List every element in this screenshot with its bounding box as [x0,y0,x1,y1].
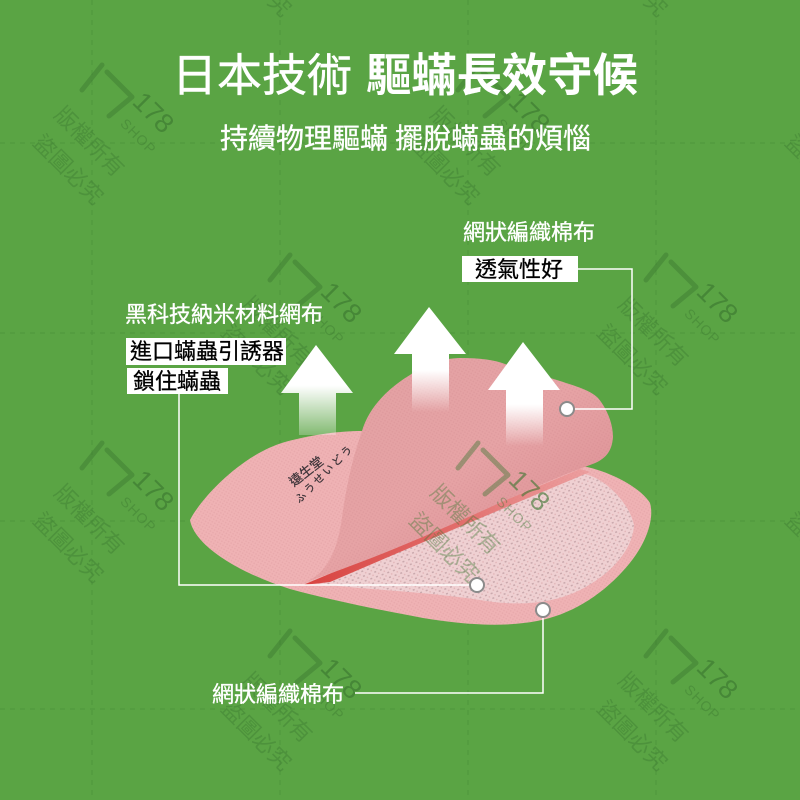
watermark 2: 盜圖必究 [404,130,484,210]
watermark 4: 版權所有 [613,292,693,372]
label: nano fabric: 黑科技納米材料網布 [125,302,323,327]
lower pad [190,431,651,625]
marker dot [536,603,550,617]
marker dot [560,402,574,416]
watermark 6 [404,443,556,588]
leader line [179,394,470,585]
fold shadow [303,469,590,585]
watermark 5: SHOP [117,493,160,536]
subtitle: 擺脫蟎蟲的煩惱 [395,123,591,154]
watermark 2: 版權所有 [425,102,505,182]
watermark 8: 版權所有 [613,668,693,748]
watermark 3: SHOP [305,305,348,348]
tag: breathable: 透氣性好 [475,257,563,282]
tag: attractant: 進口蟎蟲引誘器 [130,339,284,364]
watermark 8: 178 [691,652,744,705]
watermark 3: 178 [315,276,368,329]
watermark 7: SHOP [305,681,348,724]
watermark 3: 盜圖必究 [216,320,296,400]
watermark 6: 178 [503,464,556,517]
subtitle: 持續物理驅蟎 [220,123,388,154]
watermark 8 [592,631,744,776]
watermark 1: 版權所有 [49,102,129,182]
printed brand on pad: ふうせいどう [293,442,357,506]
watermark 2: 178 [503,86,556,139]
watermark 2: SHOP [493,115,536,158]
watermark 7 [216,631,368,776]
mesh side [320,474,634,603]
watermark 7: 盜圖必究 [216,696,296,776]
watermark 1: SHOP [117,115,160,158]
watermark 1 [28,65,180,210]
watermark 1: 盜圖必究 [28,130,108,210]
title: 日本技術 [172,50,352,101]
watermark 7: 178 [315,652,368,705]
watermark 6: 盜圖必究 [404,508,484,588]
watermark 5: 盜圖必究 [28,508,108,588]
watermark 3: 版權所有 [237,292,317,372]
arrow: middle [394,307,466,412]
watermark 4 [592,255,744,400]
watermark 6: SHOP [493,493,536,536]
leader line [574,269,632,409]
callout: top right [462,220,632,416]
watermark 5: 版權所有 [49,480,129,560]
arrow: left [281,345,353,435]
marker dot [470,578,484,592]
watermark 5: 178 [127,464,180,517]
watermark 2 [404,65,556,210]
tag: traps mites: 鎖住蟎蟲 [133,369,221,394]
folded flap [303,358,613,583]
watermark 3 [216,255,368,400]
leader line [355,617,543,693]
watermark 7: 版權所有 [237,668,317,748]
callout: bottom [212,603,550,707]
watermark 6: 版權所有 [425,480,505,560]
callout: left [125,302,484,592]
watermark 4: SHOP [681,305,724,348]
product: pink insole pad [190,358,651,625]
watermark 4: 178 [691,276,744,329]
printed brand on pad: 遠生堂 [286,454,326,489]
watermark 5 [28,443,180,588]
arrow: right [488,342,560,446]
watermark 1: 178 [127,86,180,139]
title: 驅蟎長效守候 [366,50,638,101]
watermark 8: 盜圖必究 [592,696,672,776]
watermark 8: SHOP [681,681,724,724]
label: mesh fabric bottom: 網狀編織棉布 [212,682,344,707]
watermark 4: 盜圖必究 [592,320,672,400]
label: mesh fabric: 網狀編織棉布 [463,220,595,245]
